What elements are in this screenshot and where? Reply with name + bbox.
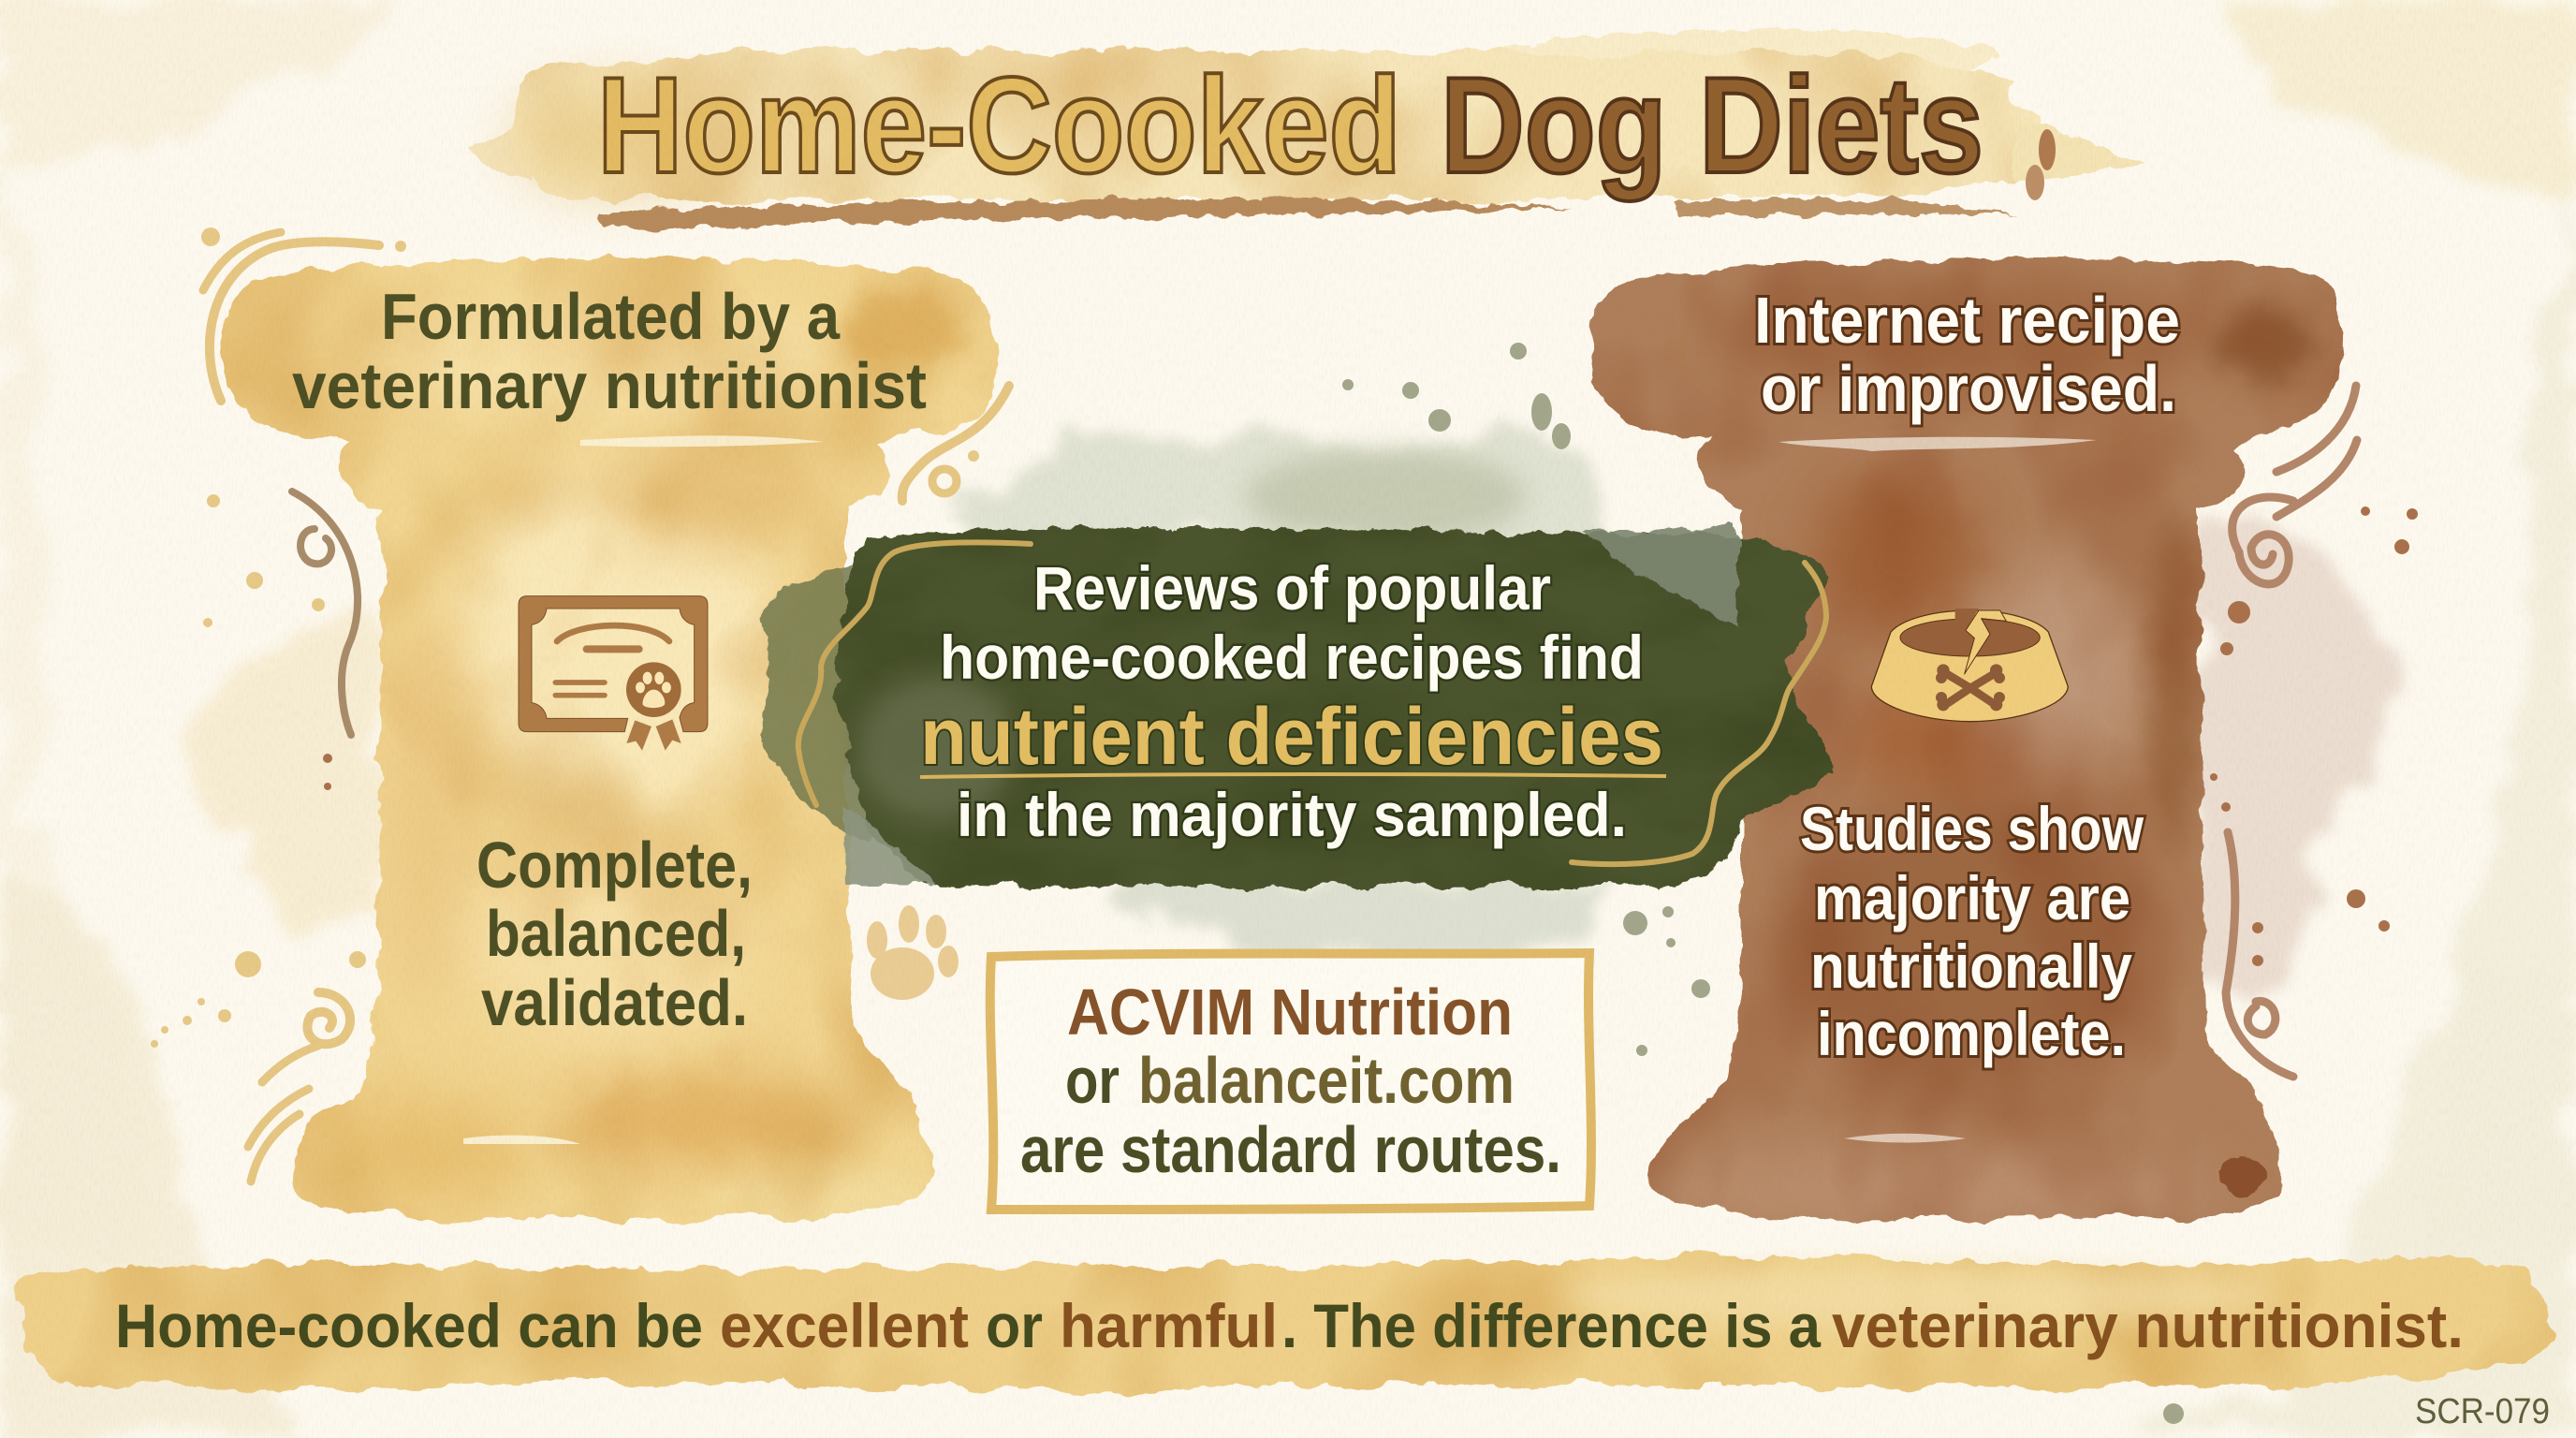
panel: left pillar — [215, 243, 1020, 1236]
title band brush wing right — [2012, 117, 2145, 180]
title — [597, 49, 1983, 201]
text block: left pillar — [476, 829, 753, 1039]
footer takeaway text: veterinary nutritionist. — [1832, 1291, 2464, 1360]
callout text: or — [1065, 1044, 1120, 1117]
banner text — [940, 553, 1644, 849]
title band left wing — [468, 126, 534, 178]
icon: certificate with paw seal — [519, 596, 708, 751]
ink blot on right pillar base — [2219, 1155, 2264, 1196]
banner grey corner lower left — [845, 805, 936, 885]
pale wash behind left pillar — [192, 609, 393, 929]
banner text: in the majority sampled. — [957, 780, 1627, 849]
reference code: SCR-079 — [2415, 1392, 2550, 1431]
title part: Dog Diets: Dog Diets — [1441, 49, 1983, 201]
heading: right pillar: or improvised. — [1761, 352, 2176, 425]
title band left shading — [515, 89, 721, 192]
footer takeaway text: Home-cooked can be — [115, 1291, 703, 1360]
banner grey corner top right — [1582, 528, 1737, 627]
banner text: Reviews of popular — [1033, 553, 1551, 623]
footer takeaway text: . The difference is a — [1281, 1291, 1822, 1360]
pale wash behind right pillar — [2190, 512, 2386, 992]
banner olive left wash — [762, 557, 871, 843]
callout text — [1020, 976, 1561, 1186]
panel: ACVIM callout box — [990, 953, 1591, 1210]
decorative swirls left — [203, 232, 1009, 1181]
title underline brush stroke — [598, 199, 1574, 228]
text block: left pillar: Complete, — [476, 829, 753, 902]
title brush band — [468, 29, 2145, 228]
banner lighter lower left wash — [856, 679, 1016, 819]
pillar base highlight right — [1844, 1134, 1966, 1142]
footer takeaway text — [115, 1291, 2464, 1360]
green wash darker patch — [1245, 449, 1526, 543]
brown ink dots — [323, 506, 2418, 966]
panel: central banner — [762, 528, 1833, 888]
title ink drop 2 — [2026, 165, 2044, 200]
callout text: ACVIM Nutrition — [1067, 976, 1513, 1049]
heading: left pillar: veterinary nutritionist — [292, 349, 927, 422]
banner dark core — [838, 528, 1833, 888]
title band upper pale wash — [1385, 29, 2003, 94]
callout text: balanceit.com — [1138, 1044, 1515, 1117]
text block: left pillar: validated. — [481, 966, 748, 1039]
banner text: home-cooked recipes find — [940, 623, 1644, 692]
highlight underline — [920, 774, 1666, 777]
highlighted phrase: nutrient deficiencies — [920, 692, 1663, 782]
pillar dark stain right — [838, 290, 969, 374]
callout text: are standard routes. — [1020, 1113, 1561, 1186]
green ink dots — [1342, 343, 2184, 1424]
text block: right pillar: Studies show — [1800, 794, 2144, 863]
footer takeaway text: excellent — [720, 1291, 969, 1360]
banner gold swoosh right — [1572, 563, 1826, 864]
banner gold swoosh left — [798, 542, 1031, 805]
heading: left pillar: Formulated by a — [381, 280, 841, 353]
title ink drop — [2039, 129, 2056, 170]
footer takeaway text: or — [986, 1291, 1043, 1360]
pale green wash below banner — [1114, 871, 1615, 973]
pillar capital highlight right — [1778, 437, 2097, 451]
footer takeaway text: harmful — [1060, 1291, 1278, 1360]
heading: right pillar: Internet recipe — [1754, 284, 2180, 357]
icon: cracked dog bowl with crossbones — [1871, 609, 2068, 722]
panel: right pillar — [1573, 243, 2378, 1236]
text block: right pillar — [1800, 794, 2144, 1068]
decorative ink dots — [151, 227, 979, 1048]
pillar capital highlight left — [580, 435, 824, 447]
pillar light centre — [459, 468, 777, 824]
text block: right pillar: nutritionally — [1810, 932, 2132, 1001]
footer band light highlight — [1563, 1267, 2275, 1327]
pillar capital light centre — [356, 304, 842, 417]
pale green wash above banner — [973, 398, 1606, 543]
heading: right pillar — [1754, 284, 2180, 425]
footer band — [15, 1255, 2550, 1391]
title underline short stroke — [1676, 198, 2014, 217]
decorative swirls right — [2226, 386, 2357, 1077]
right pillar dark text zone — [1788, 786, 2144, 1086]
pillar base highlight left — [463, 1136, 580, 1144]
callout frame — [990, 953, 1591, 1210]
decorative swirl: left brown — [292, 492, 358, 735]
title part: Home-Cooked: Home-Cooked — [597, 49, 1401, 201]
text block: right pillar: majority are — [1814, 863, 2130, 932]
icon: paw print — [867, 905, 959, 1000]
heading: left pillar — [292, 280, 927, 422]
text block: right pillar: incomplete. — [1817, 999, 2126, 1068]
text block: left pillar: balanced, — [486, 897, 746, 970]
